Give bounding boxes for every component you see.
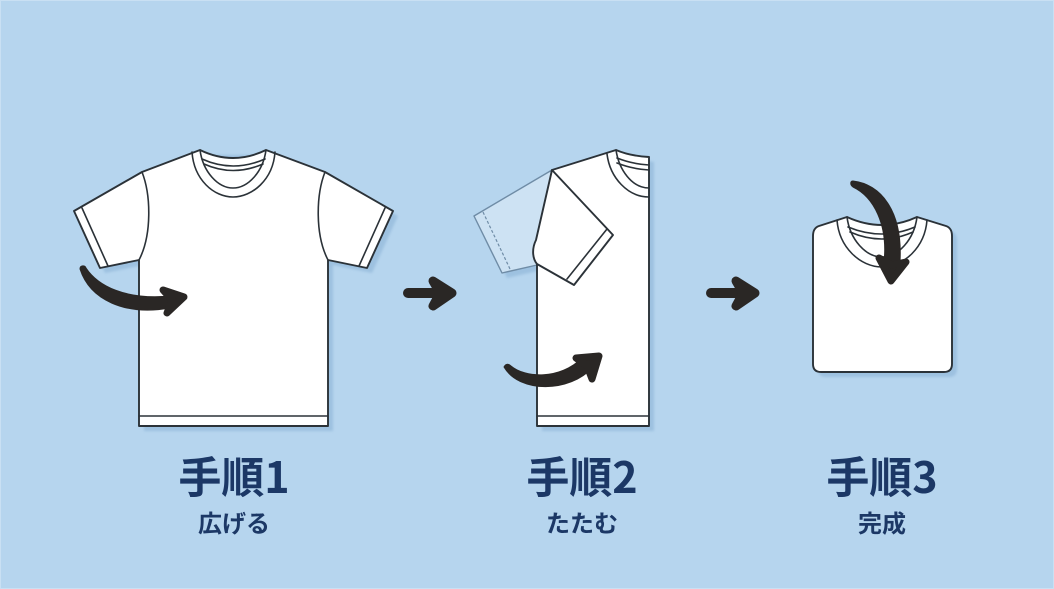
arrow: step 2 curved arrow — [504, 356, 599, 387]
arrow: step 3 curved arrow — [851, 181, 906, 281]
t-shirt collar — [192, 150, 275, 197]
caption: step 2: たたむ — [546, 504, 618, 539]
panel: step 3 folded t-shirt — [813, 217, 957, 377]
arrow: step 1 curved arrow — [80, 266, 184, 313]
arrow: step 1 to step 2 — [408, 281, 452, 306]
t-shirt collar — [607, 150, 649, 197]
caption: step 1: 広げる — [198, 504, 270, 539]
t-shirt collar — [837, 217, 927, 267]
heading: step 2: 手順2 — [526, 444, 638, 506]
heading: step 3: 手順3 — [826, 444, 938, 506]
panel: step 1 unfolded t-shirt — [74, 150, 398, 431]
folded sleeve — [533, 170, 613, 285]
ghost sleeve — [474, 170, 552, 273]
panel: step 2 folding t-shirt — [474, 150, 654, 431]
arrow: step 2 to step 3 — [711, 281, 755, 306]
heading: step 1: 手順1 — [178, 444, 290, 506]
caption: step 3: 完成 — [858, 504, 906, 539]
